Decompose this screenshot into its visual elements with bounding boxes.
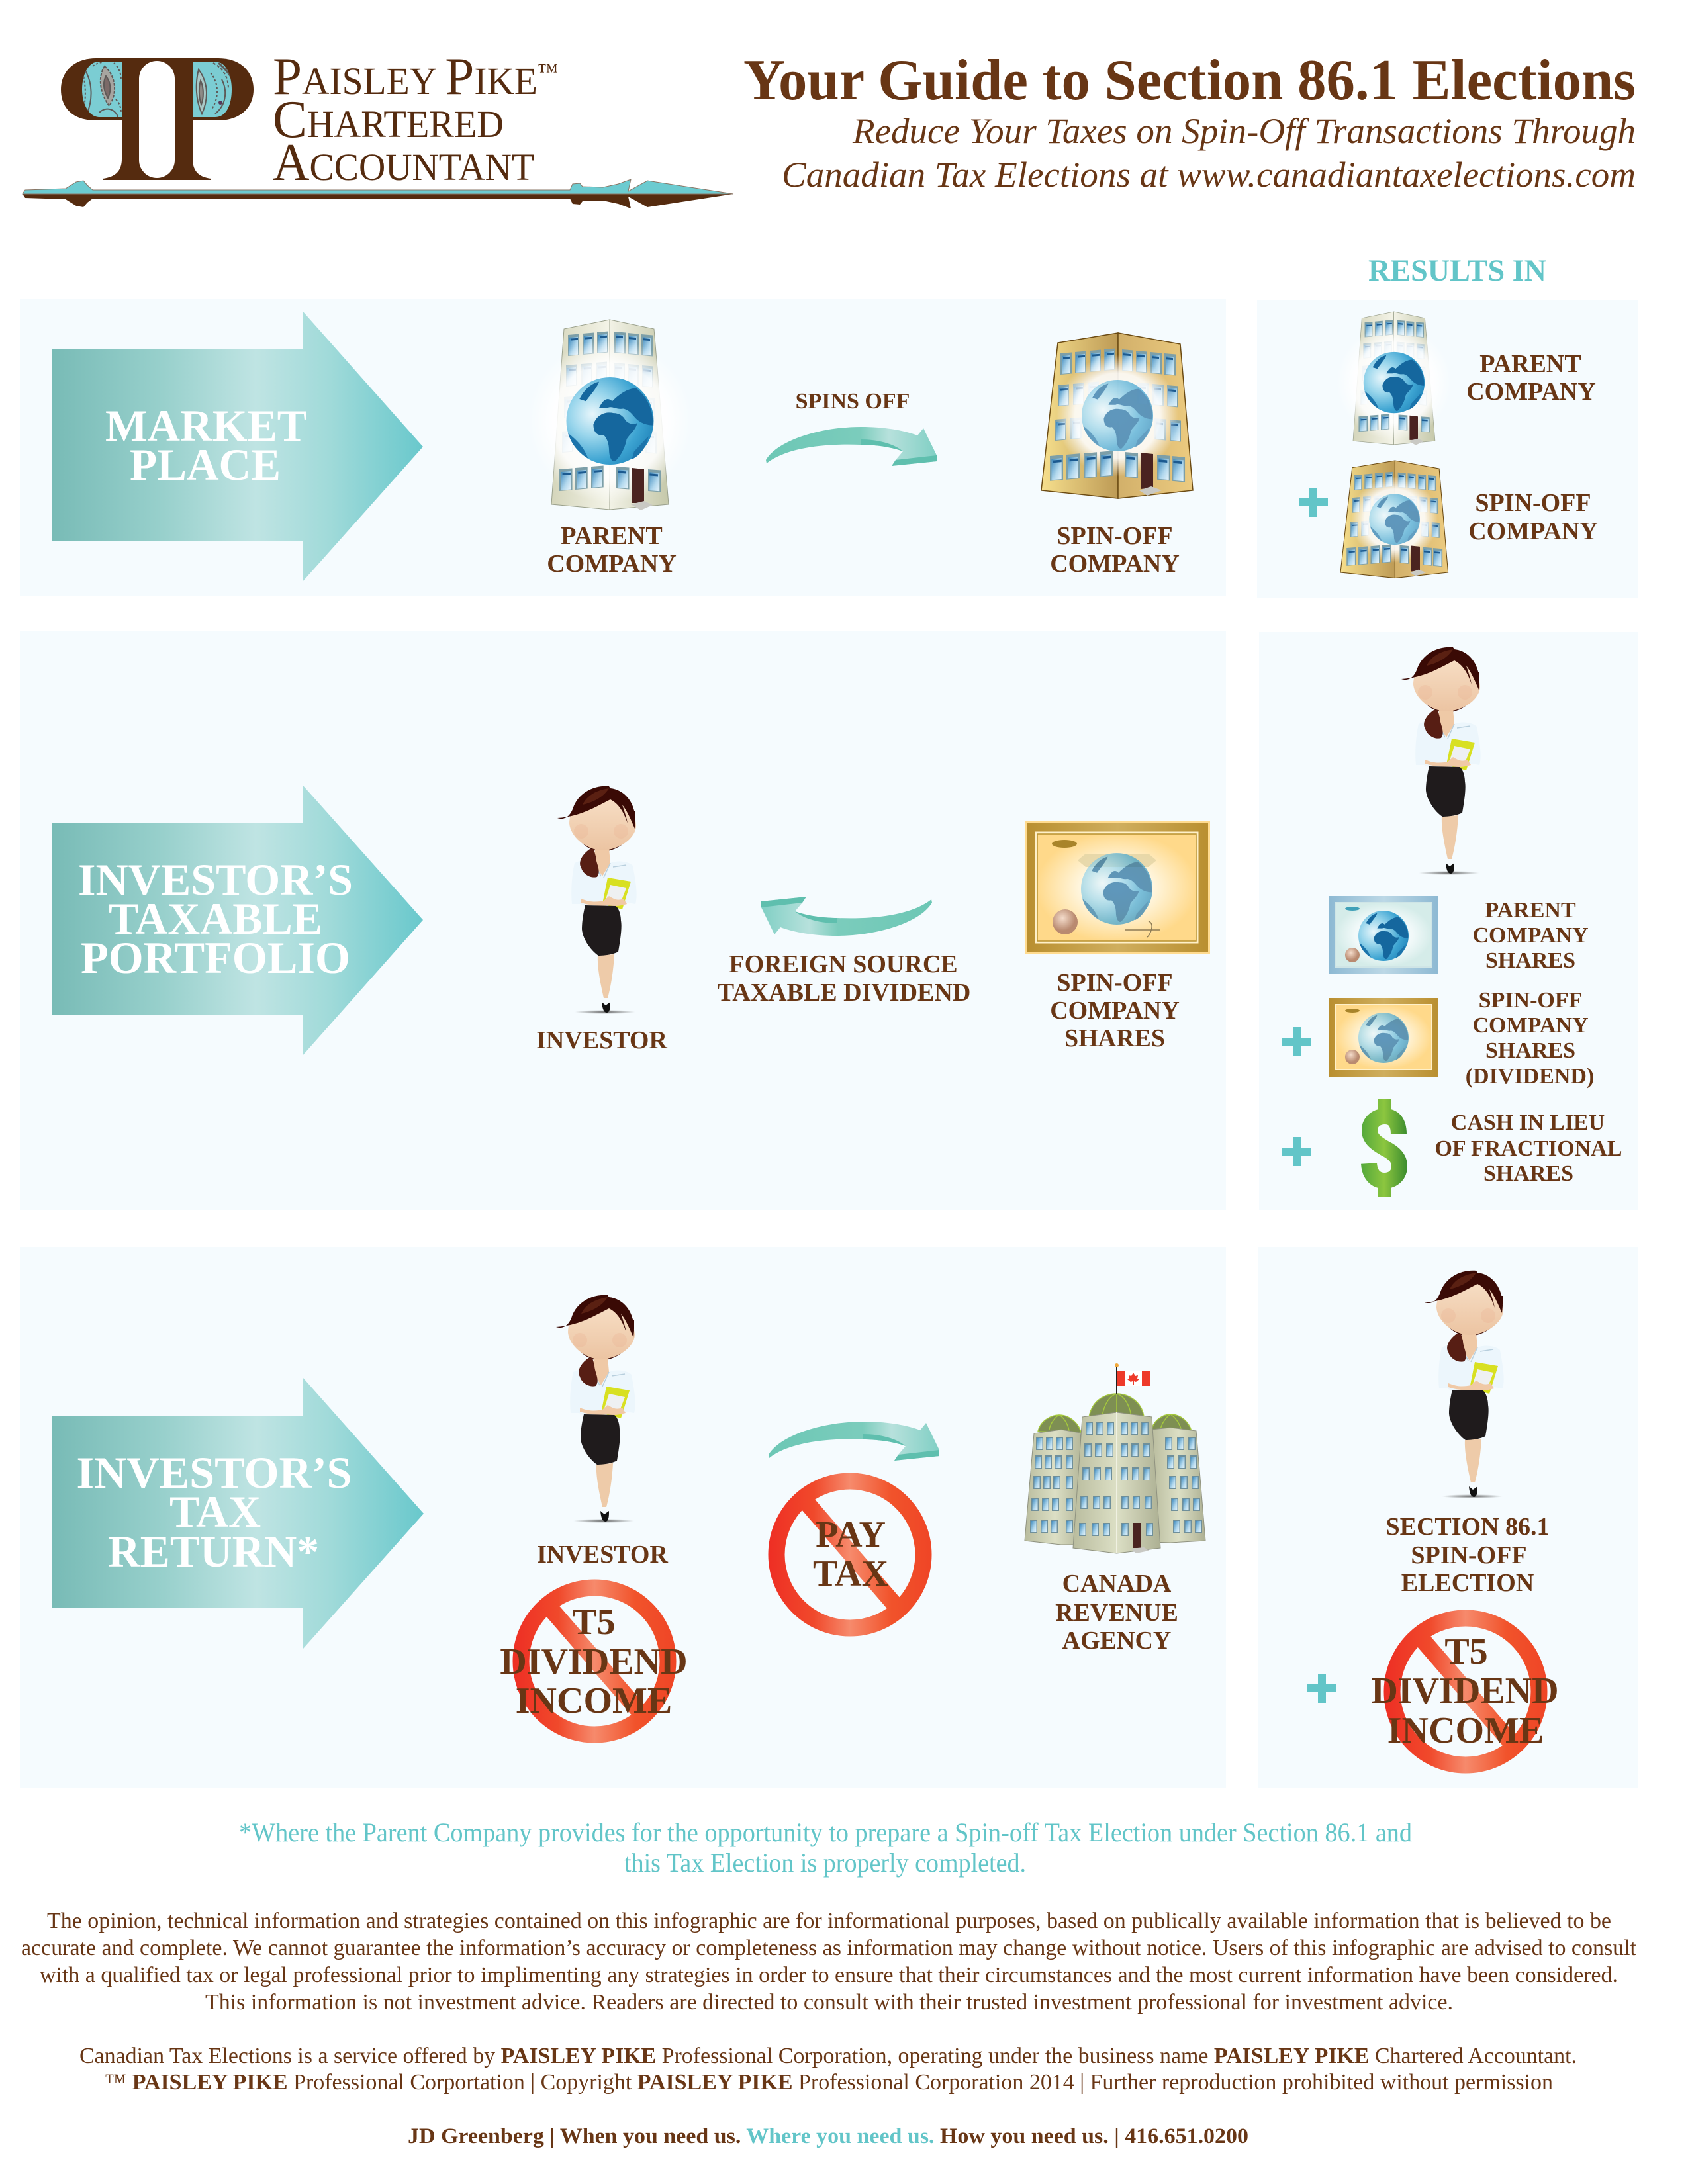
no symbol: T5 dividend income: DIVIDEND [1371, 1670, 1559, 1711]
icon: investor [1401, 647, 1481, 875]
disclaimer: accurate and complete. We cannot guarantee the information’s accuracy or completeness as information may change without notice. Users of this infographic are advised to consult [21, 1936, 1637, 1960]
logo wordmark: CHARTERED [273, 91, 504, 149]
no symbol: pay tax: PAY [816, 1514, 886, 1555]
arrow: investor's taxable portfolio: INVESTOR’S [78, 854, 353, 905]
logo wordmark: ACCOUNTANT [273, 134, 534, 192]
subtitle: Canadian Tax Elections at www.canadiantaxelections.com [782, 155, 1636, 195]
footnote: *Where the Parent Company provides for the opportunity to prepare a Spin-off Tax Election under Section 86.1 and [239, 1817, 1412, 1847]
foreign source dividend label: FOREIGN SOURCE [729, 950, 958, 978]
parent company result label: COMPANY [1466, 378, 1596, 406]
no symbol: T5 dividend income [1371, 1618, 1559, 1765]
spin-off company shares label [1050, 969, 1180, 1052]
parent company shares label: SHARES [1485, 948, 1575, 973]
arrow: investor's taxable portfolio: PORTFOLIO [81, 933, 350, 983]
no symbol: pay tax: TAX [813, 1553, 888, 1594]
spin-off company result label: SPIN-OFF [1475, 489, 1591, 517]
canada revenue agency label: AGENCY [1062, 1627, 1171, 1655]
icon: plus [1282, 1137, 1311, 1166]
disclaimer: This information is not investment advice. Readers are directed to consult with their trusted investment professional for investment advice. [205, 1990, 1453, 2015]
icon: investor [557, 786, 637, 1014]
no symbol: pay tax [776, 1481, 923, 1628]
no symbol: T5 dividend income: INCOME [516, 1680, 672, 1721]
arrow: investor's taxable portfolio [52, 785, 423, 1056]
spin-off company label [1050, 522, 1180, 578]
title: Your Guide to Section 86.1 Elections [743, 48, 1636, 113]
logo pike arrow [23, 179, 733, 208]
arrow: market place: MARKET [105, 400, 307, 451]
no symbol: T5 dividend income [500, 1588, 688, 1735]
canada revenue agency label: CANADA [1062, 1570, 1172, 1598]
arrow: investor's taxable portfolio: TAXABLE [109, 893, 322, 944]
arrow: investor's tax return: TAX [169, 1486, 261, 1537]
spin-off company shares label: SHARES [1064, 1024, 1165, 1052]
arrow: market place: PLACE [130, 439, 281, 490]
subtitle [782, 111, 1636, 195]
parent company label [547, 522, 677, 578]
icon: spin-off company building [1041, 333, 1193, 498]
spin-off company result label: COMPANY [1468, 518, 1598, 545]
spin-off company shares dividend label: SPIN-OFF [1479, 988, 1582, 1013]
foreign source dividend label: TAXABLE DIVIDEND [718, 979, 970, 1007]
spins off label: SPINS OFF [796, 389, 910, 414]
cash in lieu label: SHARES [1483, 1161, 1573, 1186]
no symbol: T5 dividend income: INCOME [1387, 1710, 1544, 1751]
icon: parent share certificate [1329, 896, 1438, 974]
panel: portfolio results [1259, 632, 1638, 1210]
icon: parent company building small [1336, 312, 1452, 445]
parent company result label: PARENT [1479, 350, 1581, 378]
parent company label: PARENT [561, 522, 663, 550]
panel: investor's taxable portfolio [20, 631, 1226, 1210]
spin-off company shares dividend label: (DIVIDEND) [1466, 1064, 1594, 1089]
cash in lieu label [1434, 1111, 1622, 1186]
logo wordmark [273, 48, 558, 192]
section 86.1 election label [1385, 1513, 1550, 1597]
service and copyright statement: Canadian Tax Elections is a service offered by PAISLEY PIKE Professional Corporation, operating under the business name PAISLEY PIKE Chartered Accountant. [79, 2044, 1577, 2068]
parent company shares label: PARENT [1485, 898, 1576, 923]
logo wordmark: PAISLEY PIKE [273, 48, 538, 106]
logo monogram [61, 58, 254, 180]
service and copyright statement [79, 2044, 1577, 2095]
arrow: investor's tax return: INVESTOR’S [77, 1447, 352, 1498]
spin-off company label: SPIN-OFF [1056, 522, 1173, 550]
section 86.1 election label: SECTION 86.1 [1385, 1513, 1550, 1541]
spin-off company shares label: COMPANY [1050, 997, 1180, 1024]
spin-off company shares dividend label [1466, 988, 1594, 1089]
contact line: JD Greenberg | When you need us. Where you need us. How you need us. | 416.651.0200 [408, 2124, 1248, 2148]
icon: plus [1307, 1674, 1336, 1703]
section 86.1 election label: SPIN-OFF [1411, 1541, 1527, 1569]
investor label: INVESTOR [536, 1026, 667, 1054]
arrow: foreign source dividend [761, 897, 932, 936]
foreign source dividend label [718, 950, 970, 1007]
arrow: investor's tax return: RETURN* [108, 1526, 319, 1576]
header: logo [23, 48, 733, 208]
panel: tax return results [1258, 1247, 1638, 1788]
spin-off company shares dividend label: SHARES [1485, 1038, 1575, 1063]
spin-off company label: COMPANY [1050, 550, 1180, 578]
arrow: investor's tax return [52, 1378, 424, 1649]
spin-off company result label [1468, 489, 1598, 545]
icon: plus [1299, 488, 1328, 517]
arrow: pay tax [769, 1422, 939, 1461]
arrow: market place [52, 311, 423, 582]
icon: investor [1425, 1271, 1504, 1498]
no symbol: T5 dividend income: DIVIDEND [500, 1641, 688, 1682]
canada revenue agency label: REVENUE [1055, 1599, 1178, 1627]
parent company shares label [1472, 898, 1589, 973]
panel: market place [20, 299, 1226, 596]
parent company label: COMPANY [547, 550, 677, 578]
disclaimer: with a qualified tax or legal professional prior to implimenting any strategies in order to ensure that their circumstances and the most current information have been considered. [40, 1963, 1618, 1987]
service and copyright statement: ™ PAISLEY PIKE Professional Corportation | Copyright PAISLEY PIKE Professional Corporation 2014 | Further reproduction prohibited without permission [105, 2070, 1553, 2095]
parent company shares label: COMPANY [1472, 923, 1589, 948]
icon: spin-off company building small [1340, 461, 1448, 578]
section 86.1 election label: ELECTION [1401, 1569, 1534, 1597]
disclaimer [21, 1909, 1637, 2015]
icon: investor [556, 1295, 635, 1523]
investor label: INVESTOR [537, 1541, 668, 1569]
parent company result label [1466, 350, 1596, 406]
spin-off company shares dividend label: COMPANY [1472, 1013, 1589, 1038]
results in heading: RESULTS IN [1368, 253, 1546, 288]
icon: canada revenue agency building [1025, 1363, 1205, 1553]
icon: dollar sign [1369, 1099, 1399, 1197]
panel: market place results [1257, 300, 1638, 598]
spin-off company shares label: SPIN-OFF [1056, 969, 1173, 997]
panel: investor's tax return [20, 1247, 1226, 1788]
subtitle: Reduce Your Taxes on Spin-Off Transactions Through [852, 111, 1636, 151]
cash in lieu label: OF FRACTIONAL [1434, 1136, 1622, 1161]
disclaimer: The opinion, technical information and strategies contained on this infographic are for informational purposes, based on publically available information that is believed to be [47, 1909, 1611, 1933]
footnote [239, 1817, 1412, 1878]
footnote: this Tax Election is properly completed. [624, 1848, 1026, 1878]
no symbol: T5 dividend income: T5 [572, 1602, 616, 1643]
arrow: spins off [766, 427, 937, 466]
canada revenue agency label [1055, 1570, 1178, 1655]
icon: plus [1282, 1027, 1311, 1056]
icon: spin-off share certificate small [1329, 998, 1438, 1077]
cash in lieu label: CASH IN LIEU [1451, 1111, 1605, 1135]
no symbol: T5 dividend income: T5 [1444, 1631, 1488, 1672]
logo wordmark: ™ [538, 59, 558, 83]
icon: parent company building [528, 320, 692, 510]
icon: spin-off share certificate [1025, 821, 1210, 954]
